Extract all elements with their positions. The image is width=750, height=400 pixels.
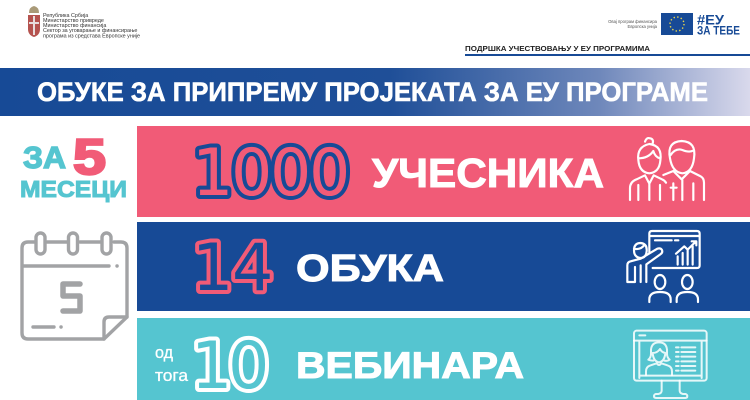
number 14: 14: [192, 231, 273, 306]
panel: trainings: [137, 222, 750, 311]
duration heading: 5: [73, 129, 106, 185]
icon: people: [630, 138, 704, 200]
duration heading: ЗА: [23, 140, 66, 175]
caption: of which: тога: [155, 366, 189, 385]
logo: Serbian coat of arms: [28, 6, 40, 37]
government institution text: Република Србија: [43, 13, 88, 19]
government institution text: [43, 13, 140, 40]
government institution text: Министарство финансија: [43, 23, 106, 29]
EU flag: [661, 13, 693, 35]
caption: of which: [155, 343, 189, 385]
number 1000: 1000: [192, 136, 350, 211]
icon: presenter with audience: [627, 231, 700, 302]
label: trainings: ОБУКА: [296, 248, 444, 290]
caption: of which: од: [155, 343, 173, 362]
government institution text: Министарство привреде: [43, 18, 104, 24]
label: webinars: ВЕБИНАРА: [296, 345, 524, 386]
hashtag logo: #ЕУ: [697, 12, 724, 28]
government institution text: Сектор за уговарање и финансирање: [43, 28, 137, 34]
hashtag logo: ЗА ТЕБЕ: [697, 24, 740, 38]
programme subtitle: ПОДРШКА УЧЕСТВОВАЊУ У ЕУ ПРОГРАМИМА: [465, 44, 651, 53]
government institution text: програма из средстава Европске уније: [43, 34, 140, 40]
title banner: ОБУКЕ ЗА ПРИПРЕМУ ПРОЈЕКАТА ЗА ЕУ ПРОГРАМЕ: [37, 77, 708, 107]
EU funding note: Европска унија: [628, 24, 658, 29]
panel: webinars: [137, 318, 750, 400]
title banner: [0, 68, 750, 116]
icon: calendar: [22, 233, 127, 339]
duration heading: [20, 129, 127, 202]
EU funding note: [608, 19, 658, 29]
hashtag logo: [697, 12, 740, 38]
panel: participants: [137, 126, 750, 217]
duration heading: МЕСЕЦИ: [20, 176, 127, 202]
icon: monitor with presenter: [634, 331, 707, 398]
label: participants: УЧЕСНИКА: [372, 150, 604, 196]
EU funding note: Овај програм финансира: [608, 19, 658, 24]
